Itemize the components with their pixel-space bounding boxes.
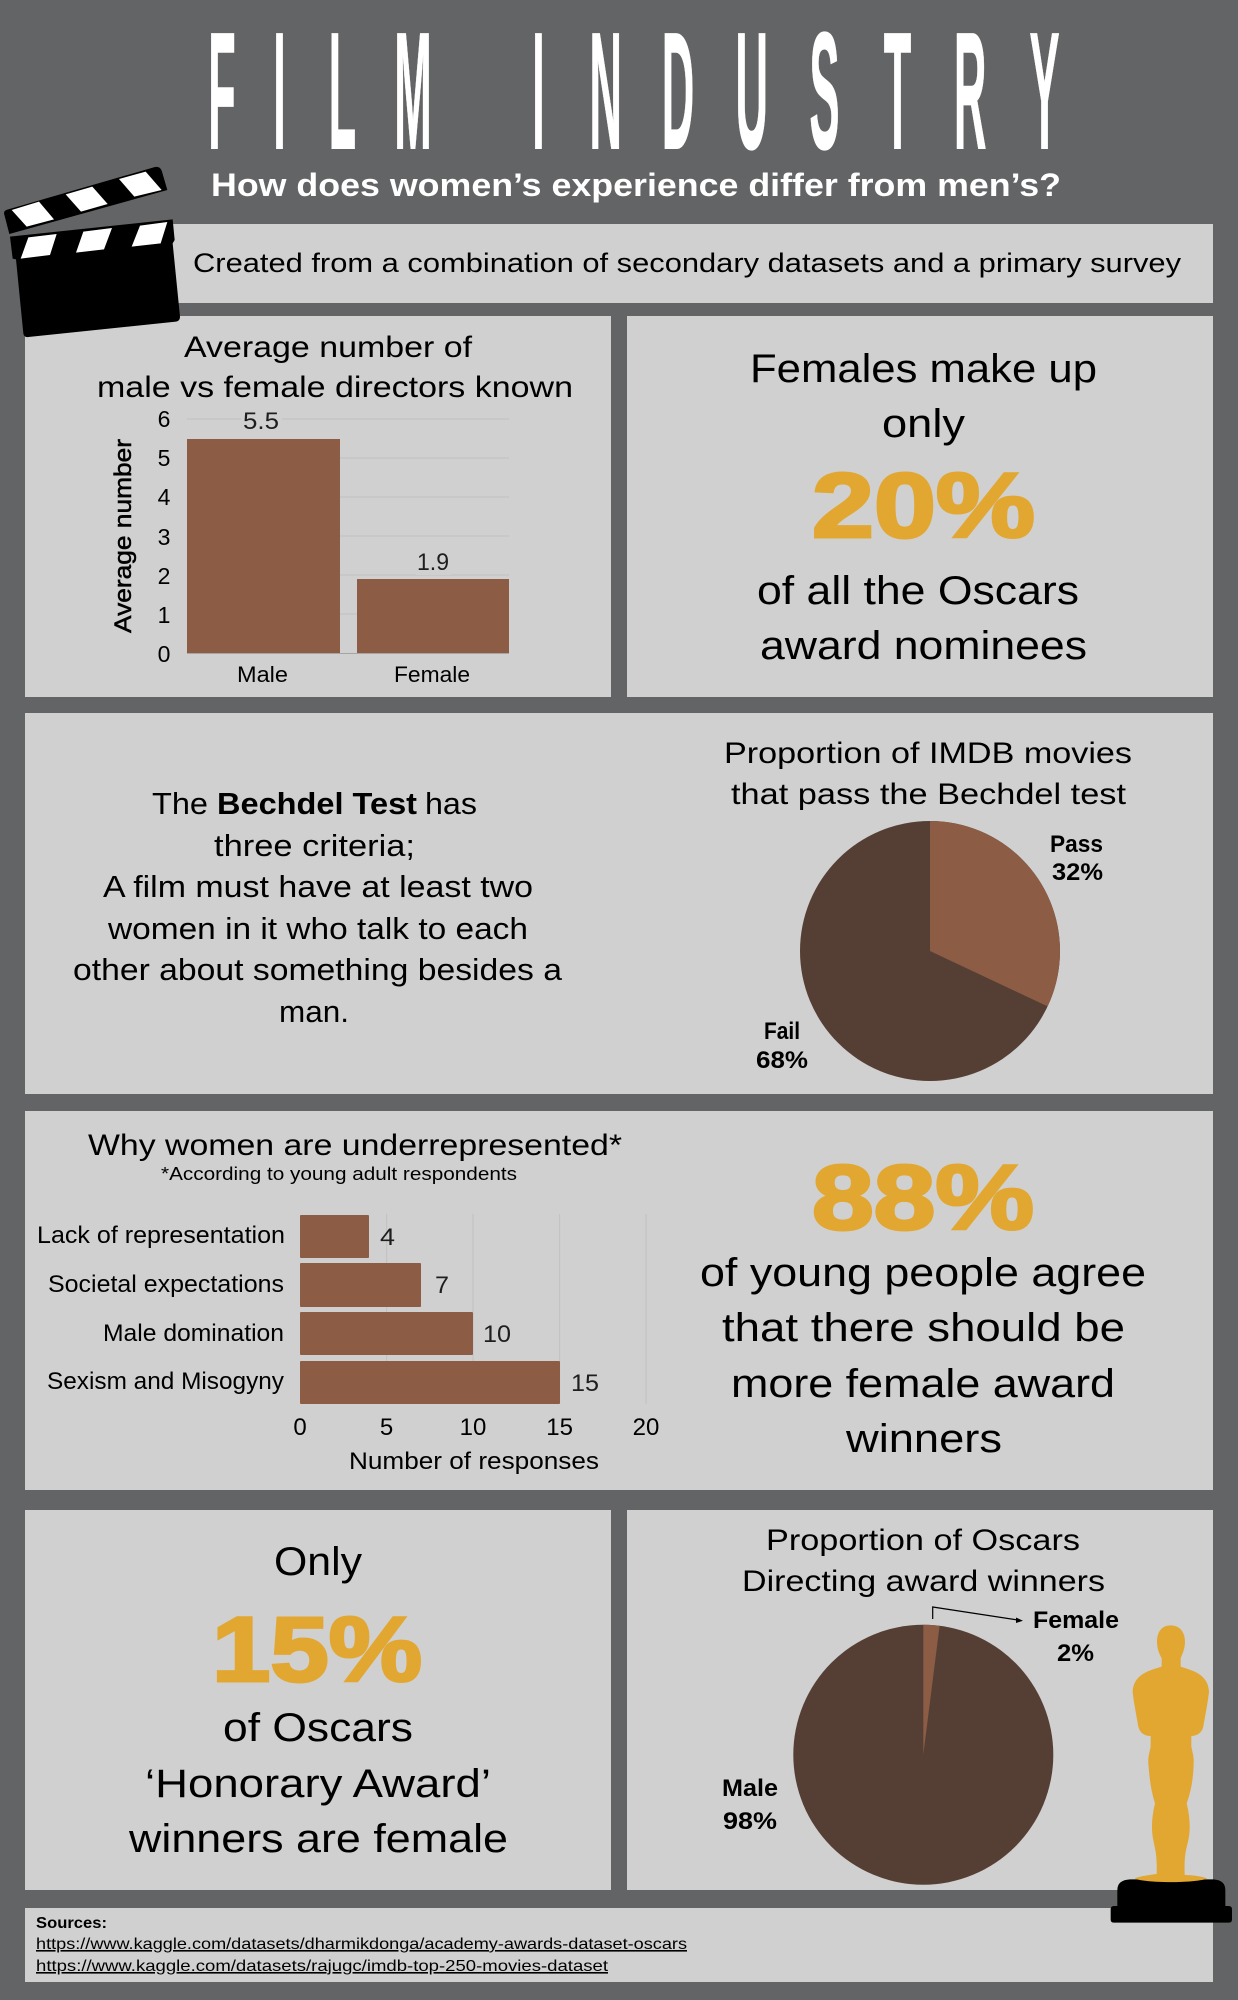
y axis ticks: 0: [158, 641, 170, 667]
pie label: male: 98%: [723, 1808, 777, 1835]
stat caption: more female award: [731, 1362, 1115, 1406]
source links: https://www.kaggle.com/datasets/dharmikdonga/academy-awards-dataset-oscars: [36, 1936, 687, 1953]
chart heading: *According to young adult respondents: [161, 1164, 517, 1184]
pie heading: Proportion of Oscars: [766, 1524, 1080, 1557]
x axis ticks: [293, 1414, 659, 1441]
pie label: fail: 68%: [756, 1047, 808, 1074]
stat caption: [128, 1706, 508, 1861]
stat: 15%: 15%: [212, 1599, 422, 1701]
y axis title: Average number: [110, 439, 137, 633]
chart heading: [88, 1129, 622, 1184]
stat: 88%: 88%: [812, 1147, 1034, 1249]
stat caption: winners are female: [128, 1817, 508, 1861]
stat caption: ‘Honorary Award’: [145, 1762, 491, 1806]
Bechdel explanation text: Bechdel Test: [217, 786, 417, 821]
pie heading: Proportion of IMDB movies: [724, 737, 1132, 770]
pie heading: that pass the Bechdel test: [731, 778, 1127, 811]
category labels: [237, 662, 470, 687]
bar: male: [187, 439, 340, 653]
slice: female 2%: [923, 1625, 940, 1755]
y axis ticks: 3: [158, 524, 170, 550]
statuette base: [1111, 1879, 1232, 1923]
horizontal bar chart: reasons: [37, 1214, 659, 1475]
x axis ticks: 15: [546, 1414, 573, 1441]
bar: male domination: [103, 1312, 511, 1355]
category labels: Female: [394, 662, 470, 687]
stat: 20%: 20%: [812, 455, 1035, 557]
pie heading: Directing award winners: [742, 1565, 1105, 1598]
bar: male domination: 10: [483, 1321, 511, 1348]
bar: sexism and misogyny: [47, 1361, 599, 1404]
title: FILM INDUSTRY: [208, 0, 1060, 184]
pie label: female: [1033, 1607, 1119, 1667]
stat caption: award nominees: [760, 624, 1087, 668]
pie label: male: [722, 1775, 778, 1835]
slice: pass 32%: [930, 821, 1060, 1006]
pie chart: directing winners: [793, 1625, 1053, 1885]
bar: sexism and misogyny: 15: [571, 1370, 599, 1397]
value label: male: 5.5: [243, 408, 279, 435]
panel: directors bar chart: [25, 316, 611, 697]
pie label: pass: Pass: [1050, 831, 1103, 858]
panel: directing award pie: [627, 1510, 1213, 1890]
value label: female: 1.9: [417, 549, 449, 576]
x axis ticks: 10: [460, 1414, 486, 1441]
chart heading: male vs female directors known: [97, 371, 573, 404]
Bechdel explanation text: other about something besides a: [73, 952, 563, 987]
panel: intro strip: [170, 224, 1213, 303]
bar: societal expectations: 7: [435, 1272, 449, 1299]
statuette figure: [1133, 1625, 1209, 1882]
stat caption: that there should be: [722, 1306, 1125, 1350]
x axis ticks: 5: [380, 1414, 393, 1441]
Bechdel explanation text: [73, 786, 563, 1029]
sources heading: Sources:: [36, 1915, 107, 1932]
stat caption: of all the Oscars: [757, 569, 1079, 613]
chart heading: Average number of: [184, 331, 473, 364]
pie label: fail: [756, 1018, 808, 1074]
bar: lack of representation: Lack of representation: [37, 1222, 285, 1249]
Bechdel explanation text: A film must have at least two: [103, 869, 533, 904]
subtitle: How does women’s experience differ from men’s?: [211, 167, 1061, 203]
bar: sexism and misogyny: Sexism and Misogyny: [47, 1368, 284, 1395]
chart heading: [97, 331, 573, 404]
bar: societal expectations: Societal expectations: [48, 1271, 284, 1298]
pie label: pass: 32%: [1052, 859, 1103, 886]
panel: sources: [25, 1908, 1213, 1982]
panel: Bechdel test: [25, 713, 1213, 1094]
Bechdel explanation text: has: [425, 786, 477, 821]
y axis ticks: [158, 406, 171, 667]
y axis ticks: 6: [158, 406, 170, 432]
pie label: pass: [1050, 831, 1103, 886]
icon: Oscar statuette: [1111, 1625, 1232, 1923]
source links: https://www.kaggle.com/datasets/rajugc/imdb-top-250-movies-dataset: [36, 1958, 609, 1975]
arrow: female leader line: [933, 1607, 1023, 1623]
stat caption: of young people agree: [700, 1251, 1146, 1295]
Bechdel explanation text: man.: [279, 994, 349, 1029]
x axis ticks: 20: [633, 1414, 659, 1441]
stat caption: of Oscars: [223, 1706, 413, 1750]
bar: lack of representation: 4: [380, 1224, 395, 1251]
chart heading: Why women are underrepresented*: [88, 1129, 622, 1162]
stat lead-in: Females make up: [750, 347, 1097, 391]
intro text: Created from a combination of secondary datasets and a primary survey: [193, 248, 1182, 278]
pie label: fail: Fail: [764, 1018, 800, 1045]
stat lead-in: only: [882, 402, 965, 446]
y axis ticks: 2: [158, 563, 170, 589]
pie heading: [742, 1524, 1105, 1598]
stat caption: winners: [845, 1417, 1002, 1461]
pie chart: Bechdel pass/fail: [800, 821, 1060, 1081]
pie label: male: Male: [722, 1775, 778, 1802]
bar: male domination: Male domination: [103, 1320, 284, 1347]
stat caption: [700, 1251, 1146, 1461]
bar: lack of representation: [37, 1215, 395, 1258]
Bechdel explanation text: The: [152, 786, 208, 821]
y axis ticks: 1: [158, 602, 170, 628]
y axis ticks: 4: [158, 484, 171, 510]
stat lead-in: Only: [274, 1540, 362, 1584]
category labels: Male: [237, 662, 288, 687]
bar: societal expectations: [48, 1263, 449, 1307]
bar: female: [357, 579, 509, 653]
icon: clapperboard: [4, 167, 180, 337]
source links: [36, 1936, 687, 1975]
x axis title: Number of responses: [349, 1448, 599, 1475]
Bechdel explanation text: three criteria;: [214, 828, 415, 863]
panel: underrepresentation chart and stat: [25, 1111, 1213, 1490]
y axis ticks: 5: [158, 445, 170, 471]
stat caption: [757, 569, 1087, 668]
Bechdel explanation text: women in it who talk to each: [107, 911, 528, 946]
stat lead-in: [750, 347, 1097, 446]
pie label: female: Female: [1033, 1607, 1119, 1634]
pie label: female: 2%: [1057, 1640, 1094, 1667]
panel: Oscar nominees stat: [627, 316, 1213, 697]
bar chart: directors known: [110, 406, 509, 687]
pie heading: [724, 737, 1132, 811]
x axis ticks: 0: [293, 1414, 307, 1441]
panel: honorary award stat: [25, 1510, 611, 1890]
